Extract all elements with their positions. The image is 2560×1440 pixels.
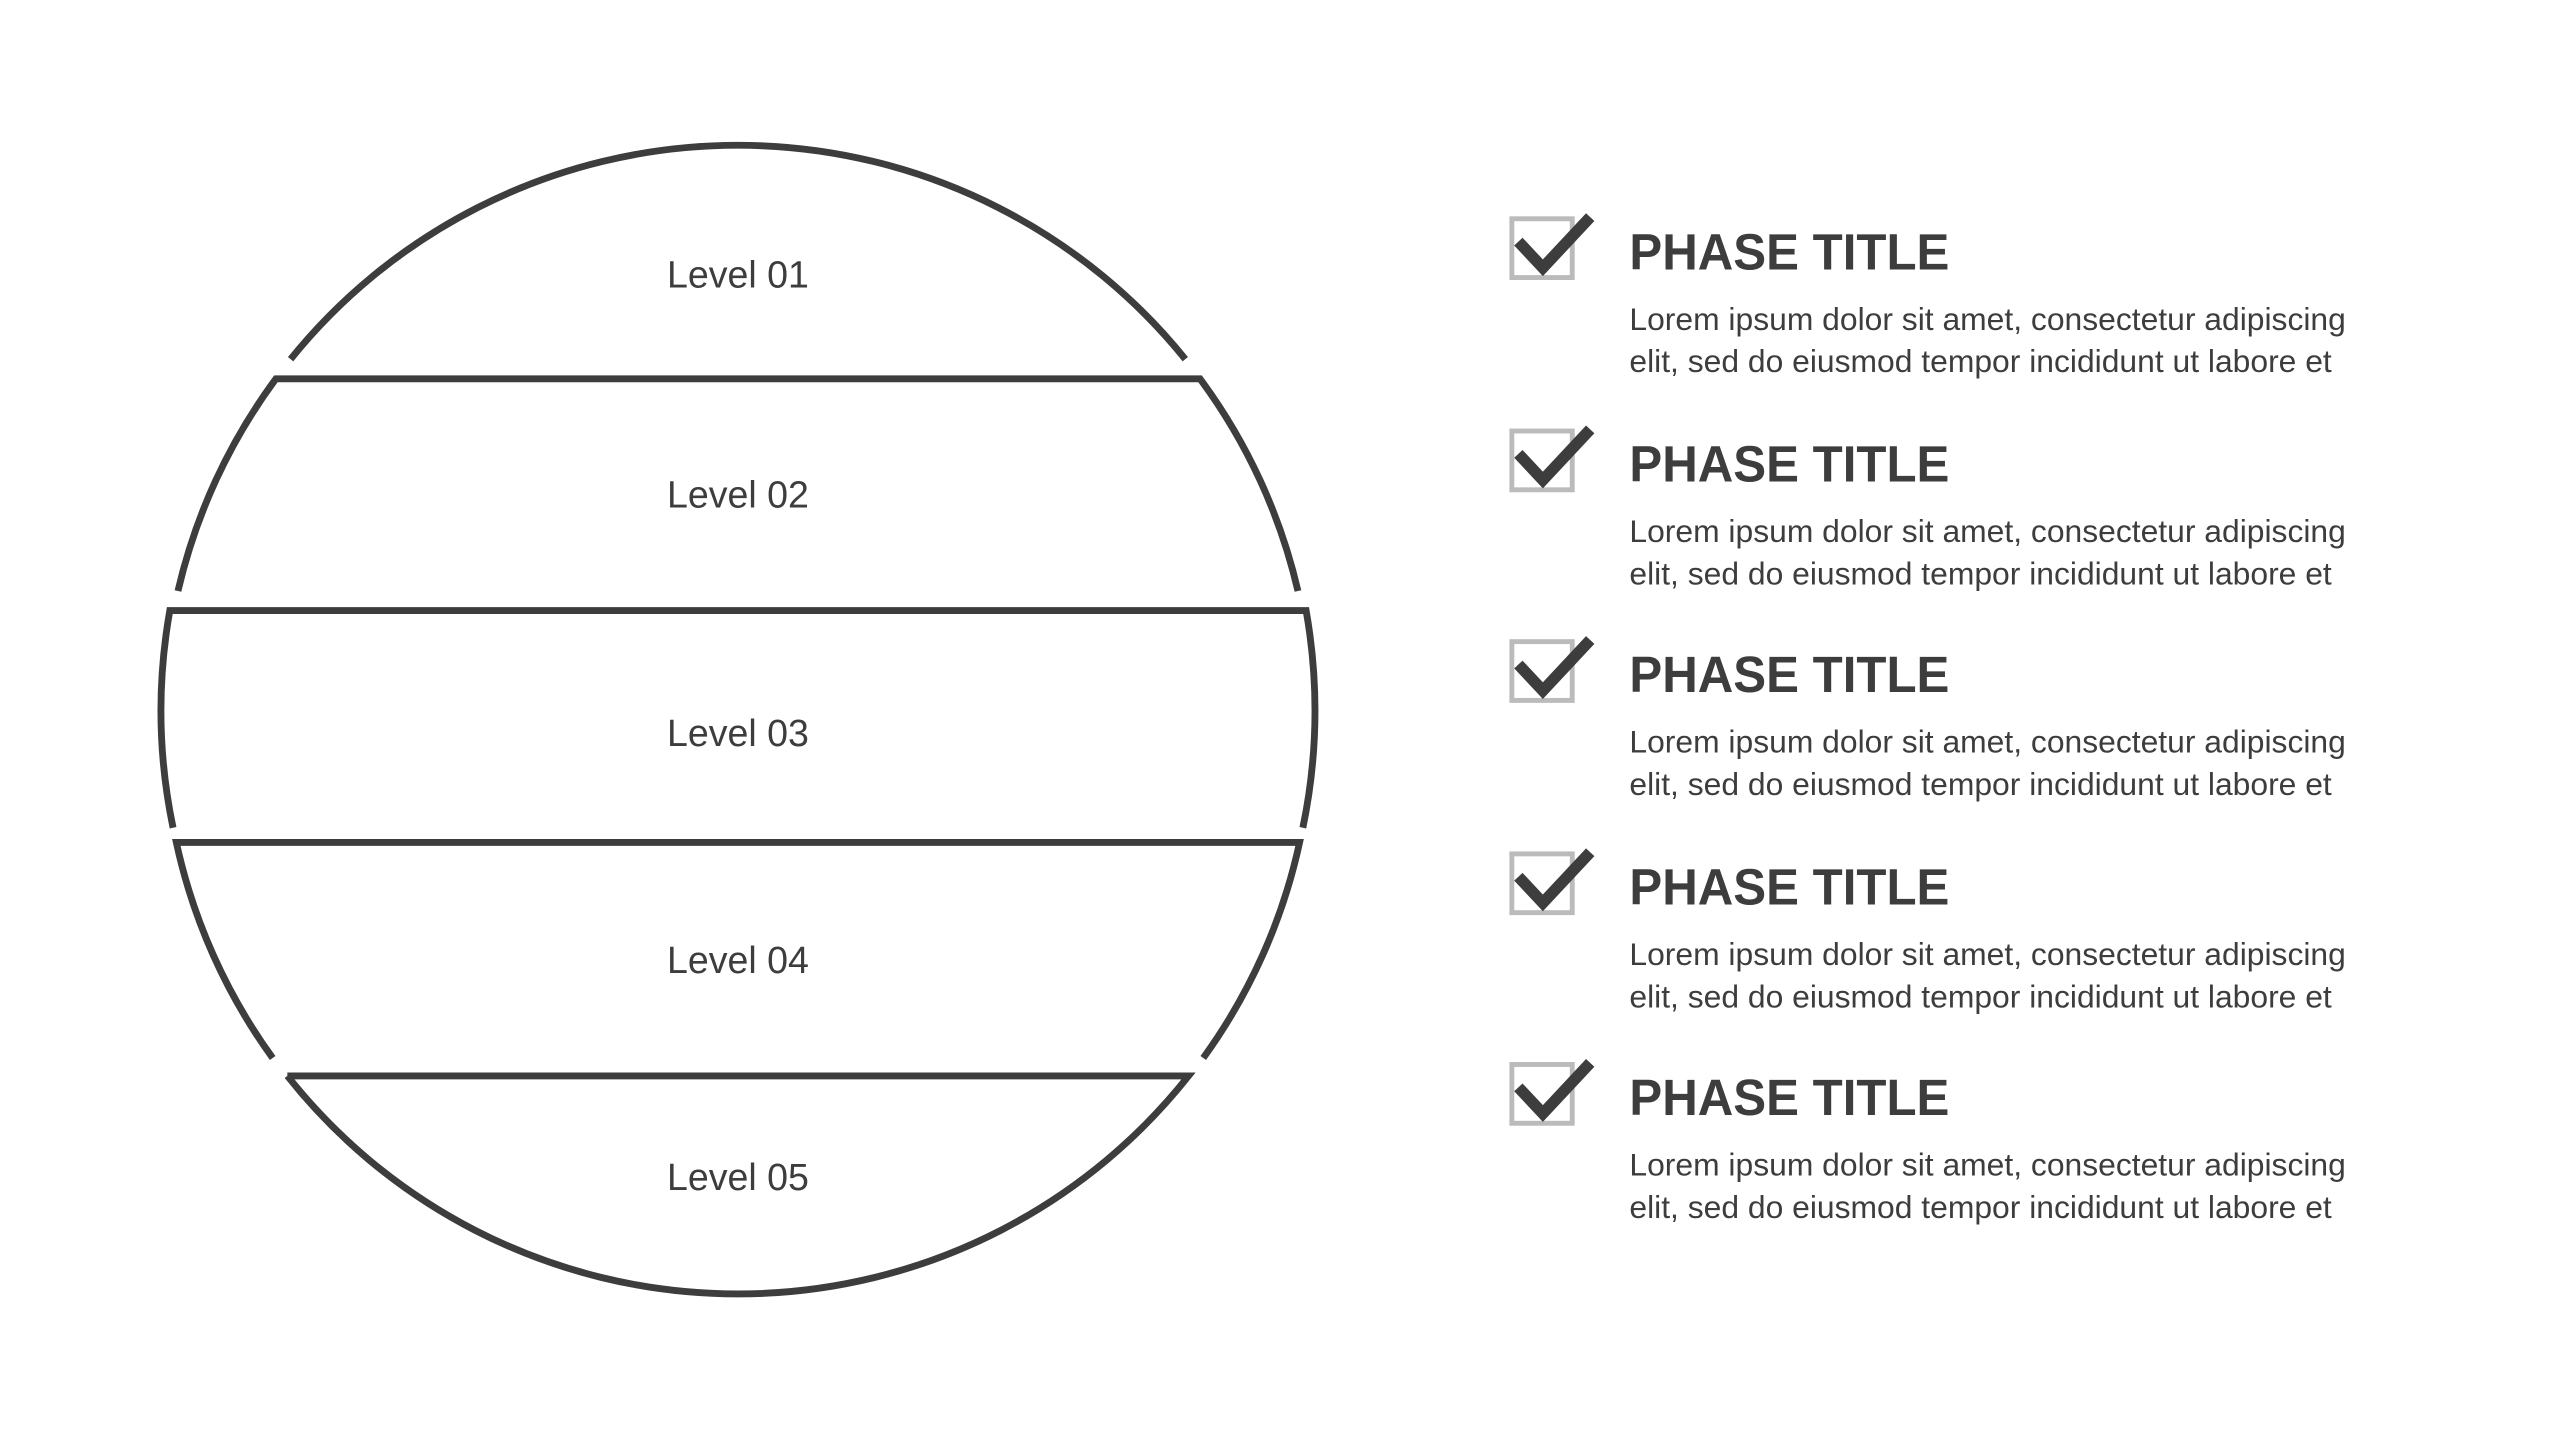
phase item 2: elit, sed do eiusmod tempor incididunt ut labore et (1629, 555, 2332, 591)
band: level 05: Level 05 (667, 1156, 809, 1198)
band: level 01: Level 01 (667, 253, 809, 295)
band: level 02 (178, 379, 1298, 591)
phase item 2 (1512, 429, 2346, 591)
phase item 4: elit, sed do eiusmod tempor incididunt ut labore et (1629, 978, 2332, 1014)
icon: checkbox (1512, 852, 1590, 913)
band: level 02: Level 02 (667, 474, 809, 516)
phase item 4: PHASE TITLE (1629, 858, 1949, 915)
phase item 5: PHASE TITLE (1629, 1069, 1949, 1126)
phase item 4: Lorem ipsum dolor sit amet, consectetur adipiscing (1629, 936, 2346, 972)
icon: checkbox (1512, 429, 1590, 490)
phase item 2: PHASE TITLE (1629, 436, 1949, 493)
band: level 01 (291, 145, 1185, 359)
phase item 3 (1512, 640, 2346, 802)
phase item 5: Lorem ipsum dolor sit amet, consectetur adipiscing (1629, 1147, 2346, 1183)
band: level 04 (176, 842, 1300, 1058)
icon: checkbox (1512, 217, 1590, 278)
sphere diagram (161, 145, 1315, 1294)
phase item 4 (1512, 852, 2346, 1014)
icon: checkbox (1512, 640, 1590, 700)
phase item 2: Lorem ipsum dolor sit amet, consectetur adipiscing (1629, 513, 2346, 549)
band: level 05 (287, 1076, 1189, 1294)
phase item 1 (1512, 217, 2346, 379)
phase item 3: elit, sed do eiusmod tempor incididunt ut labore et (1629, 766, 2332, 802)
phase item 1: elit, sed do eiusmod tempor incididunt ut labore et (1629, 343, 2332, 379)
band: level 03 (161, 611, 1315, 828)
phase item 3: PHASE TITLE (1629, 646, 1949, 703)
phase item 1: Lorem ipsum dolor sit amet, consectetur adipiscing (1629, 301, 2346, 337)
phase list (1512, 217, 2346, 1225)
phase item 5 (1512, 1063, 2346, 1225)
phase item 1: PHASE TITLE (1629, 223, 1949, 280)
band: level 04: Level 04 (667, 939, 809, 981)
phase item 5: elit, sed do eiusmod tempor incididunt ut labore et (1629, 1189, 2332, 1225)
icon: checkbox (1512, 1063, 1590, 1123)
band: level 03: Level 03 (667, 712, 809, 754)
phase item 3: Lorem ipsum dolor sit amet, consectetur adipiscing (1629, 724, 2346, 760)
